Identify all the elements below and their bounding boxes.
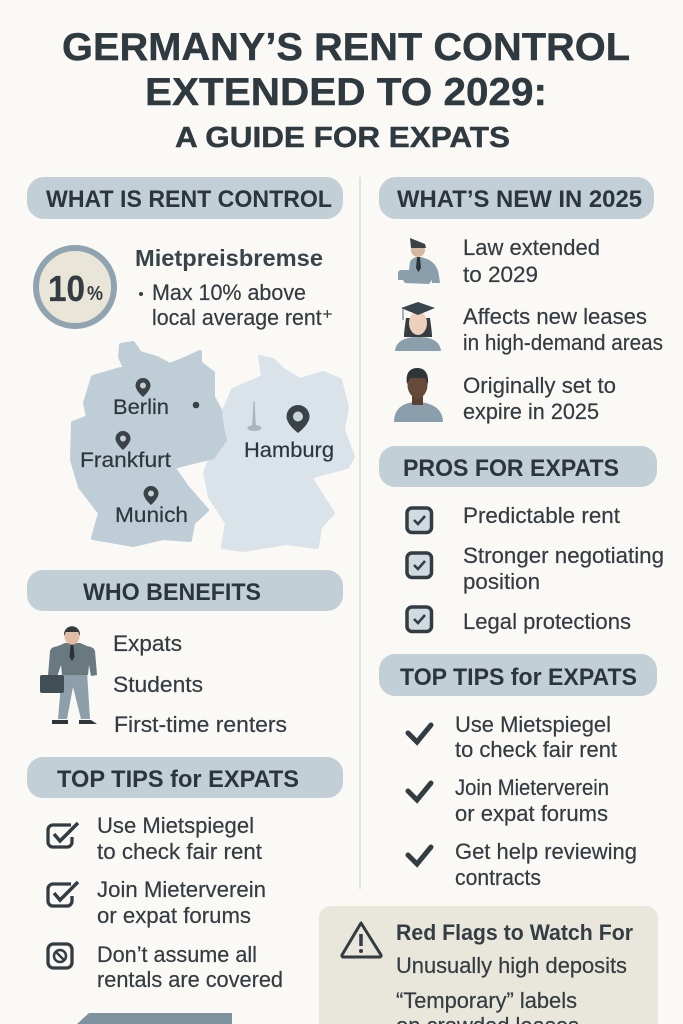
tip: get help reviewing contracts (408, 839, 637, 890)
tip: do not assume all rentals covered: rentals are covered (97, 967, 283, 992)
tip: use Mietspiegel (48, 813, 262, 864)
item: predictable rent (407, 503, 620, 532)
tip: use Mietspiegel: Use Mietspiegel (97, 813, 254, 838)
item: law extended: Law extended (463, 235, 600, 260)
heading: red flags: Red Flags to Watch For (396, 920, 633, 945)
text: Mietpreisbremse definition: Max 10% above (152, 280, 306, 305)
item: affects new leases: Affects new leases (463, 304, 647, 329)
text: red flags list: “Temporary” labels (396, 988, 577, 1013)
title: GERMANY’S RENT CONTROL (62, 26, 630, 69)
text: Mietpreisbremse definition: local average rent⁺ (152, 305, 333, 330)
map: Germany cities left: Berlin (113, 396, 169, 419)
icon: cropped slate shape at bottom (77, 1013, 232, 1024)
item: stronger negotiating position (407, 543, 664, 594)
item: predictable rent: Predictable rent (463, 503, 620, 528)
icon: warning triangle (342, 923, 381, 957)
text: red flags list (396, 953, 627, 1024)
heading: who benefits (27, 570, 343, 611)
title: EXTENDED TO 2029: (145, 71, 547, 114)
heading: who benefits: WHO BENEFITS (83, 579, 261, 606)
item: affects new leases (395, 302, 663, 355)
item: originally set to expire: expire in 2025 (463, 399, 599, 424)
tip: get help reviewing contracts: contracts (455, 865, 541, 890)
item: law extended (398, 235, 600, 287)
icon: businessman with briefcase (40, 626, 97, 724)
heading: top tips left (27, 757, 343, 798)
text: beneficiaries list: Expats (113, 631, 182, 656)
heading: top tips right (379, 654, 657, 696)
text: Mietpreisbremse definition (135, 245, 333, 330)
heading: what is rent control (27, 177, 343, 219)
heading: top tips right: TOP TIPS for EXPATS (400, 664, 637, 691)
tip: do not assume all rentals covered (48, 942, 283, 992)
map: Germany Hamburg right (205, 357, 353, 550)
text: red flags list: Unusually high deposits (396, 953, 627, 978)
icon: 10 percent badge (36, 248, 114, 326)
tip: get help reviewing contracts: Get help reviewing (455, 839, 637, 864)
panel: top tips left (27, 757, 343, 992)
panel: red flags (319, 906, 658, 1024)
item: originally set to expire: Originally set to (463, 373, 616, 398)
tip: join Mieterverein: or expat forums (97, 903, 251, 928)
title (62, 26, 630, 154)
item: legal protections: Legal protections (463, 609, 631, 634)
panel: what is rent control (27, 177, 353, 550)
text: beneficiaries list: Students (113, 672, 203, 697)
title: A GUIDE FOR EXPATS (175, 122, 510, 154)
tip: join Mieterverein: or expat forums (455, 801, 608, 826)
item: legal protections (407, 607, 631, 634)
item: stronger negotiating position: Stronger negotiating (463, 543, 664, 568)
panel: what's new in 2025 (379, 177, 663, 424)
panel: who benefits (27, 570, 343, 737)
icon: 10 percent badge: 10 (48, 268, 85, 309)
tip: use Mietspiegel: to check fair rent (97, 839, 262, 864)
map: Germany cities left (72, 343, 225, 545)
map: Germany cities left: Munich (115, 504, 188, 527)
tip: join Mieterverein: Join Mieterverein (97, 877, 266, 902)
heading: pros: PROS FOR EXPATS (403, 455, 619, 482)
heading: what's new (379, 177, 654, 219)
item: stronger negotiating position: position (463, 569, 540, 594)
tip: use Mietspiegel: Use Mietspiegel (455, 712, 611, 737)
panel: pros for expats (379, 446, 664, 634)
item: law extended: to 2029 (463, 262, 538, 287)
tip: do not assume all rentals covered: Don’t assume all (97, 942, 257, 967)
heading: pros (379, 446, 657, 487)
item: affects new leases: in high-demand areas (463, 330, 663, 355)
tip: use Mietspiegel: to check fair rent (455, 737, 617, 762)
panel: top tips right (379, 654, 657, 890)
tip: join Mieterverein (48, 877, 266, 928)
tip: join Mieterverein: Join Mieterverein (455, 775, 609, 800)
tip: use Mietspiegel (408, 712, 617, 762)
heading: top tips left: TOP TIPS for EXPATS (57, 766, 299, 793)
text: beneficiaries list (113, 631, 287, 737)
heading: what's new: WHAT’S NEW IN 2025 (397, 186, 642, 213)
heading: what is rent control: WHAT IS RENT CONTROL (46, 186, 332, 213)
map: Germany cities left: Frankfurt (80, 449, 171, 472)
item: originally set to expire (394, 368, 616, 424)
text: beneficiaries list: First-time renters (114, 712, 287, 737)
tip: join Mieterverein (408, 775, 609, 826)
text: Mietpreisbremse definition: Mietpreisbremse (135, 245, 323, 271)
icon: 10 percent badge: % (87, 283, 103, 305)
map: Germany Hamburg right: Hamburg (244, 439, 334, 462)
